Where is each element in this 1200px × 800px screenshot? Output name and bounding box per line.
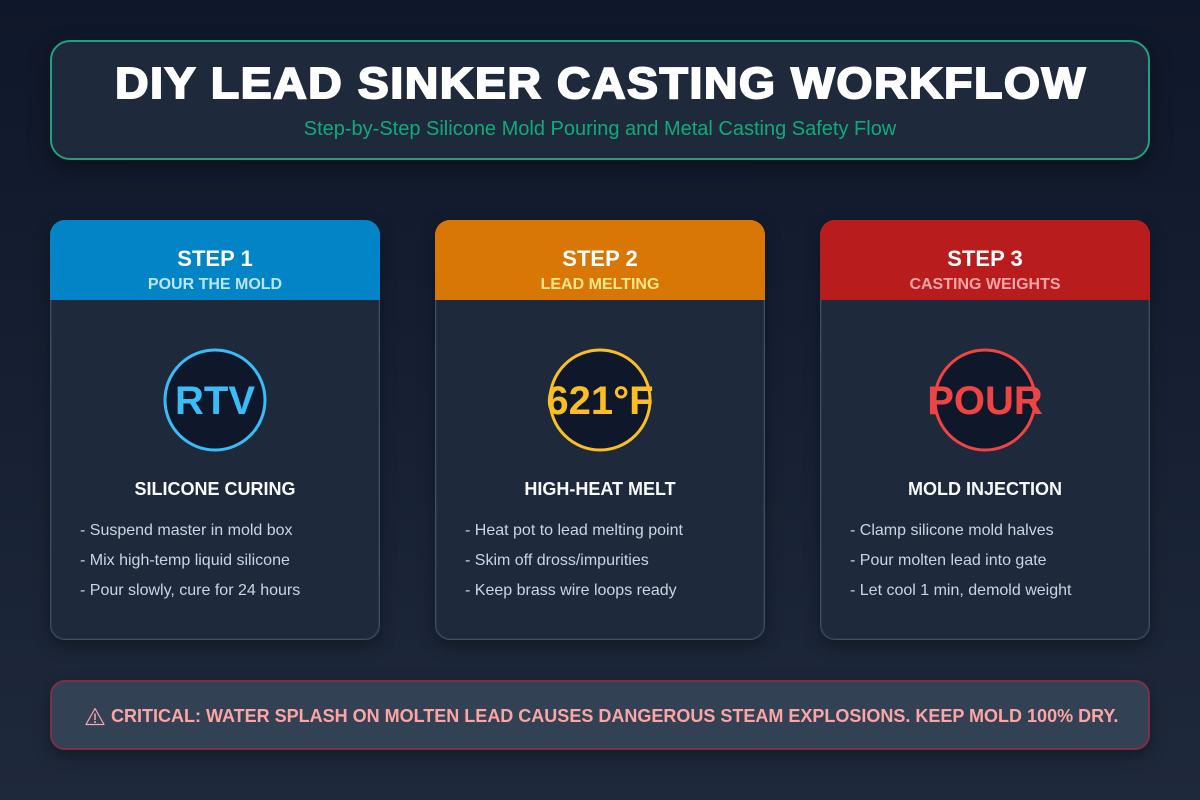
step 2 list: - Heat pot to lead melting point xyxy=(465,522,683,539)
step 1 list: - Mix high-temp liquid silicone xyxy=(80,552,290,569)
step 2 label: STEP 2 xyxy=(562,246,638,271)
step 3 list: - Pour molten lead into gate xyxy=(850,552,1047,569)
step 2 header xyxy=(435,220,765,300)
step 3 list: - Clamp silicone mold halves xyxy=(850,522,1054,539)
temperature label: 621°F xyxy=(546,379,654,423)
step 1 list xyxy=(80,522,300,599)
step 1 label: STEP 1 xyxy=(177,246,253,271)
step 2 list xyxy=(465,522,683,599)
icon: RTV circle xyxy=(164,348,266,452)
panel: step 2 xyxy=(435,220,765,640)
pour label: POUR xyxy=(927,379,1043,423)
step 3 subtitle: CASTING WEIGHTS xyxy=(909,276,1061,293)
RTV label: RTV xyxy=(175,379,255,423)
icon: temperature circle xyxy=(548,348,652,452)
step 3 heading: MOLD INJECTION xyxy=(908,479,1062,499)
step 1 header xyxy=(50,220,380,300)
step 1 list: - Suspend master in mold box xyxy=(80,522,293,539)
step 1 subtitle: POUR THE MOLD xyxy=(148,276,282,293)
step 2 list: - Skim off dross/impurities xyxy=(465,552,649,569)
step 3 list xyxy=(850,522,1072,599)
panel: step 1 xyxy=(50,220,380,640)
step 3 header xyxy=(820,220,1150,300)
panel: step 3 xyxy=(820,220,1150,640)
step 2 subtitle: LEAD MELTING xyxy=(541,276,659,293)
warning banner xyxy=(50,680,1150,750)
icon: pour circle xyxy=(935,348,1036,452)
step 1 heading: SILICONE CURING xyxy=(134,479,296,499)
icon: warning triangle xyxy=(85,708,105,726)
step 3 list: - Let cool 1 min, demold weight xyxy=(850,582,1071,599)
step 3 label: STEP 3 xyxy=(947,246,1023,271)
title banner xyxy=(50,40,1150,160)
warning text: CRITICAL: WATER SPLASH ON MOLTEN LEAD CAUSES DANGEROUS STEAM EXPLOSIONS. KEEP MOLD 100% DRY. xyxy=(111,706,1118,726)
title: DIY LEAD SINKER CASTING WORKFLOW xyxy=(115,59,1087,108)
step 2 list: - Keep brass wire loops ready xyxy=(465,582,677,599)
subtitle: Step-by-Step Silicone Mold Pouring and Metal Casting Safety Flow xyxy=(304,118,896,140)
step 1 list: - Pour slowly, cure for 24 hours xyxy=(80,582,300,599)
step 2 heading: HIGH-HEAT MELT xyxy=(524,479,676,499)
